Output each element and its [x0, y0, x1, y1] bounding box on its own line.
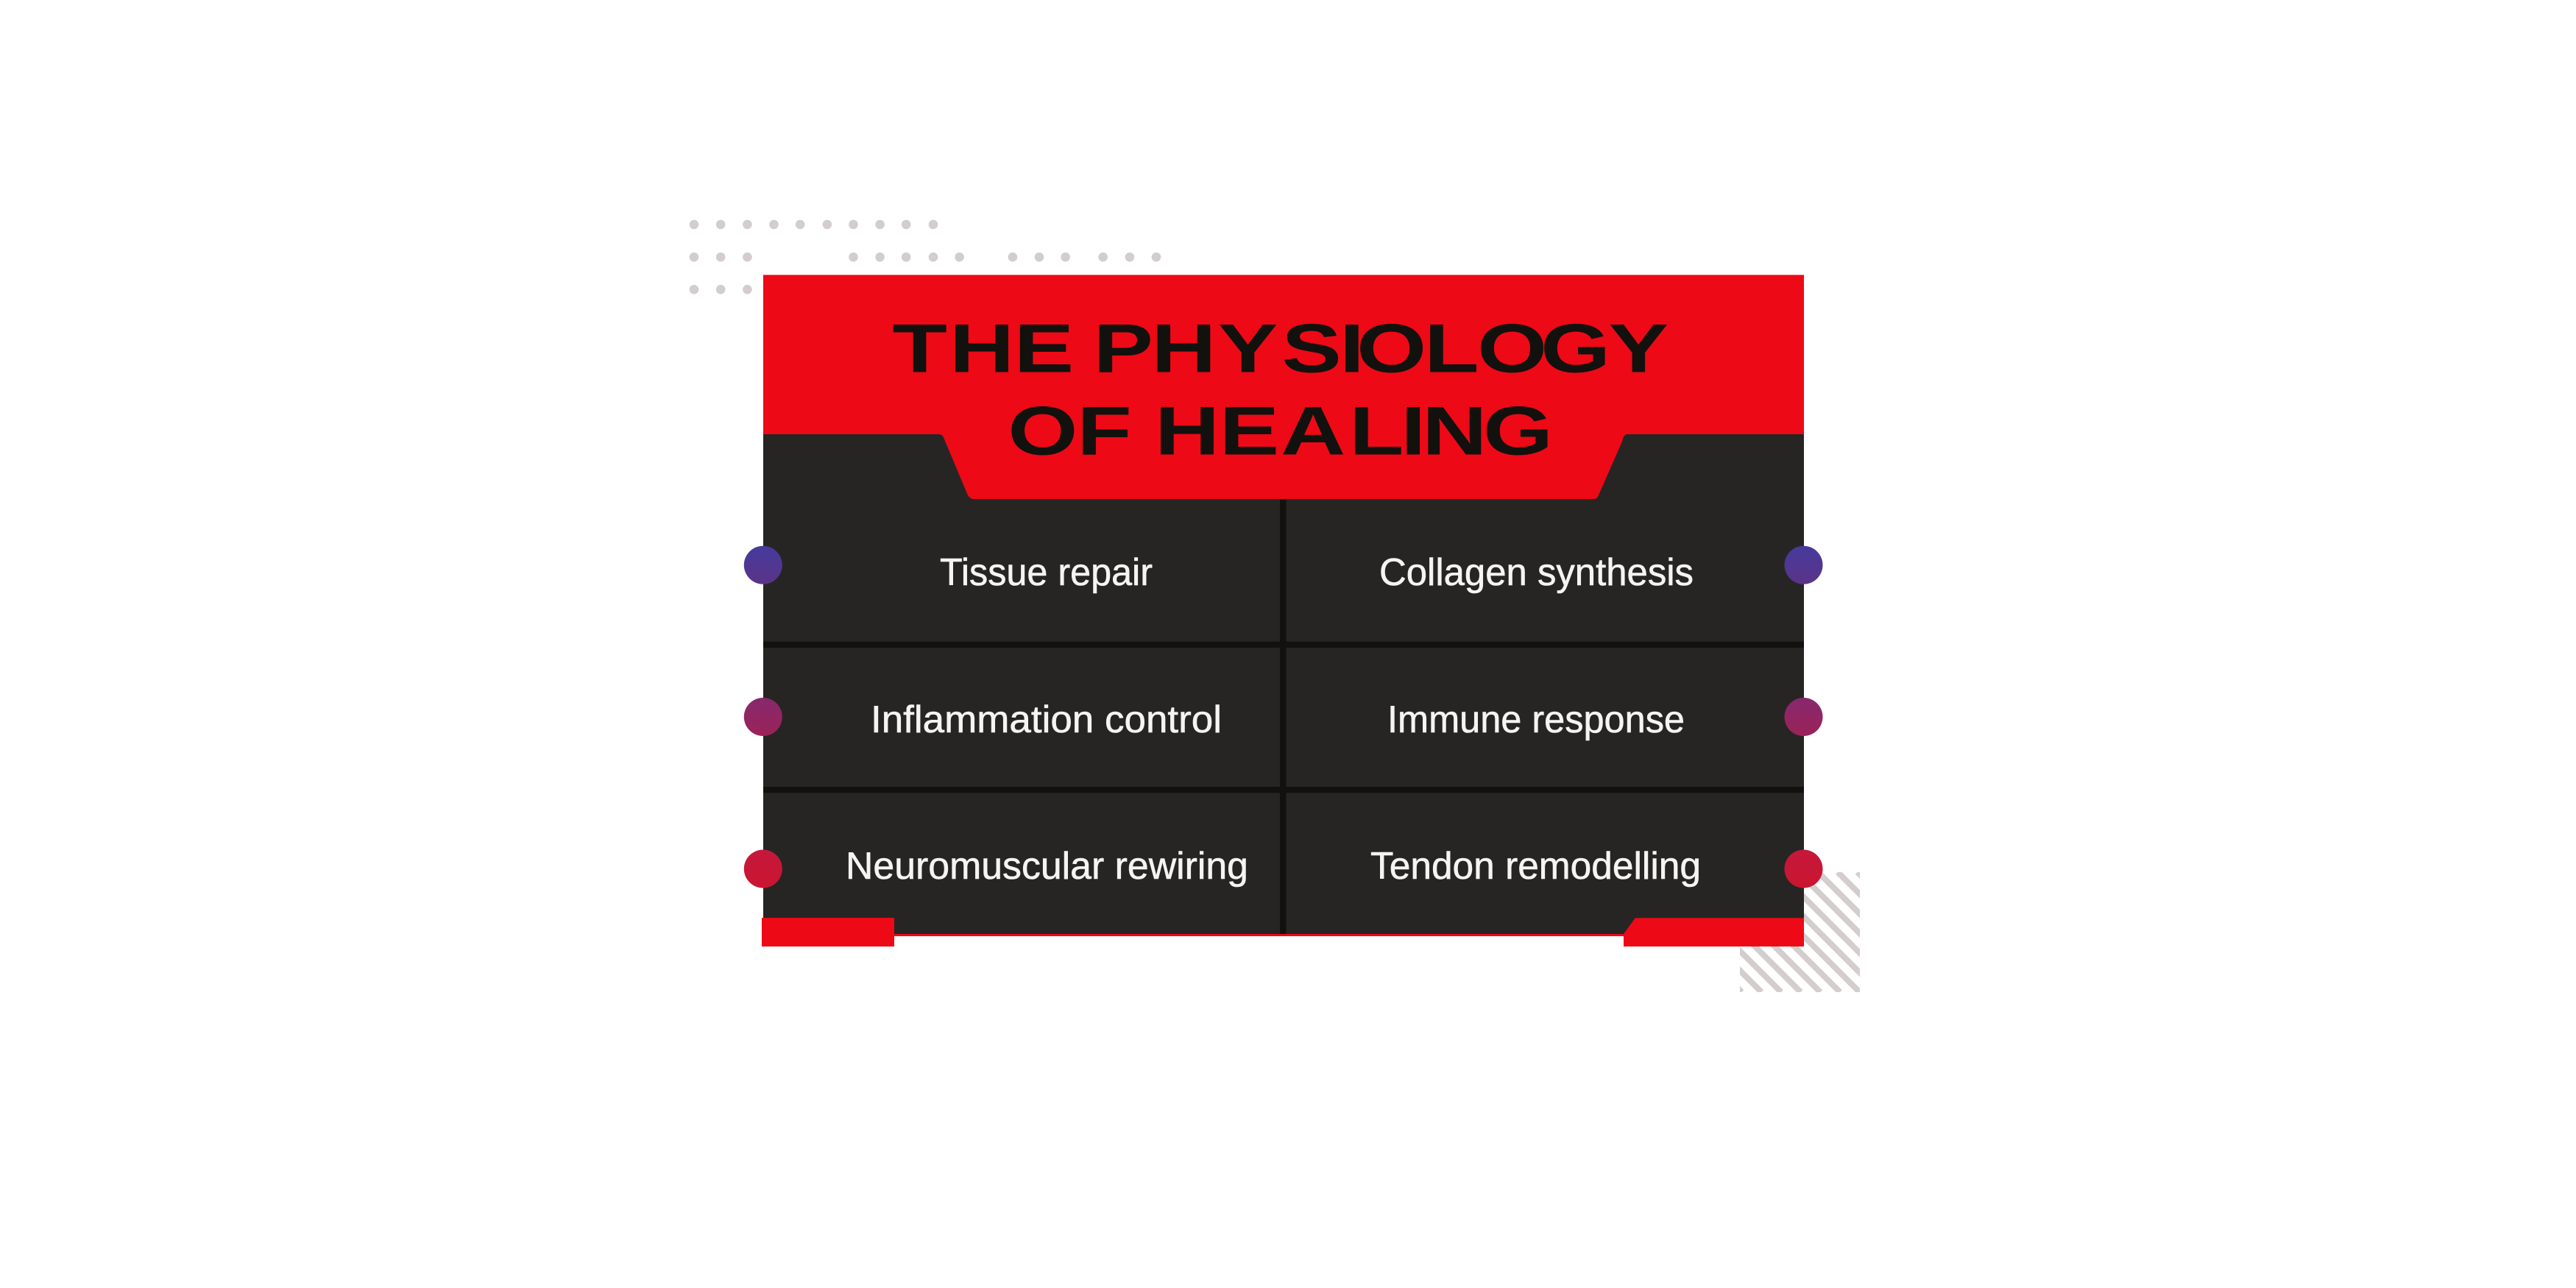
panel: dark grid of healing factors [763, 412, 1804, 936]
label: Immune response: Immune response [1387, 698, 1685, 741]
title: OF HEALING [1008, 392, 1553, 470]
bottom-right red corner block [1624, 918, 1804, 946]
hatched square decoration [1740, 872, 1860, 992]
dot grid decoration [690, 220, 1161, 294]
label: Collagen synthesis: Collagen synthesis [1379, 551, 1694, 594]
title: THE PHYSIOLOGY [892, 310, 1669, 387]
label: Neuromuscular rewiring: Neuromuscular rewiring [846, 845, 1248, 888]
marker dots [744, 546, 1822, 888]
red title banner [763, 275, 1804, 499]
label: Inflammation control: Inflammation control [871, 698, 1222, 741]
title [892, 310, 1669, 470]
label: Tissue repair: Tissue repair [940, 551, 1153, 594]
bottom-left red corner block [762, 918, 894, 946]
label: Tendon remodelling: Tendon remodelling [1370, 845, 1701, 888]
